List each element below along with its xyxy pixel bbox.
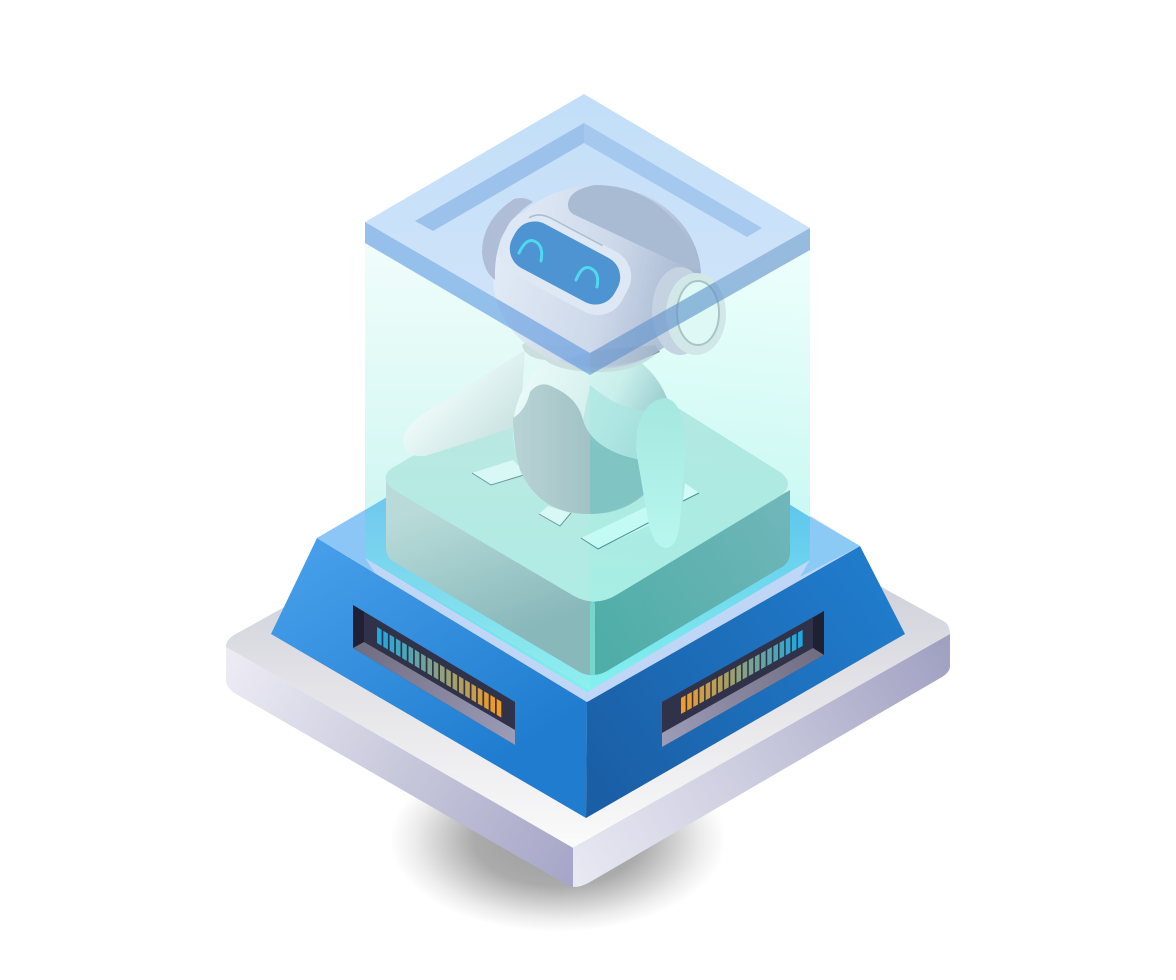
robot right arm (636, 398, 686, 548)
pedestal right face (586, 546, 905, 818)
glass back walls (365, 100, 810, 517)
head top patch (568, 185, 701, 270)
right eye (576, 268, 598, 287)
base slab (226, 542, 950, 887)
robot side panel (583, 385, 655, 462)
platform top (385, 360, 788, 602)
lid right face (590, 228, 810, 375)
platform right side (593, 490, 790, 675)
pedestal (271, 380, 905, 818)
left status vent (353, 605, 515, 745)
pedestal top right corner (800, 517, 860, 577)
ground shadow (390, 748, 726, 932)
right ear (652, 267, 726, 355)
pedestal top left corner (317, 510, 375, 573)
right indicator bars (681, 630, 803, 714)
head sphere (493, 185, 701, 369)
inner platform (385, 360, 790, 675)
neck dark band (560, 345, 660, 367)
robot neck (522, 342, 660, 372)
lid recess left (415, 123, 584, 231)
glass floor (365, 380, 810, 692)
robot head (482, 185, 726, 369)
platform corner highlight (590, 603, 595, 675)
robot torso (513, 346, 673, 514)
platform left side (386, 480, 593, 675)
visor (489, 201, 641, 325)
lid recess right (584, 123, 762, 237)
robot belly right shade (590, 440, 665, 514)
glass right pane (590, 250, 810, 690)
pedestal top band (317, 380, 860, 702)
floor mats (472, 460, 699, 549)
robot belly (513, 384, 640, 514)
right status vent (662, 611, 824, 747)
glass left pane (365, 243, 590, 690)
head left ear crescent (482, 198, 533, 280)
pedestal left face (271, 538, 587, 818)
robot left arm (403, 350, 525, 456)
left indicator bars (377, 627, 501, 718)
lid left face (365, 222, 590, 375)
left eye (519, 240, 542, 261)
lid top face (365, 94, 810, 353)
robot body group (403, 342, 686, 548)
